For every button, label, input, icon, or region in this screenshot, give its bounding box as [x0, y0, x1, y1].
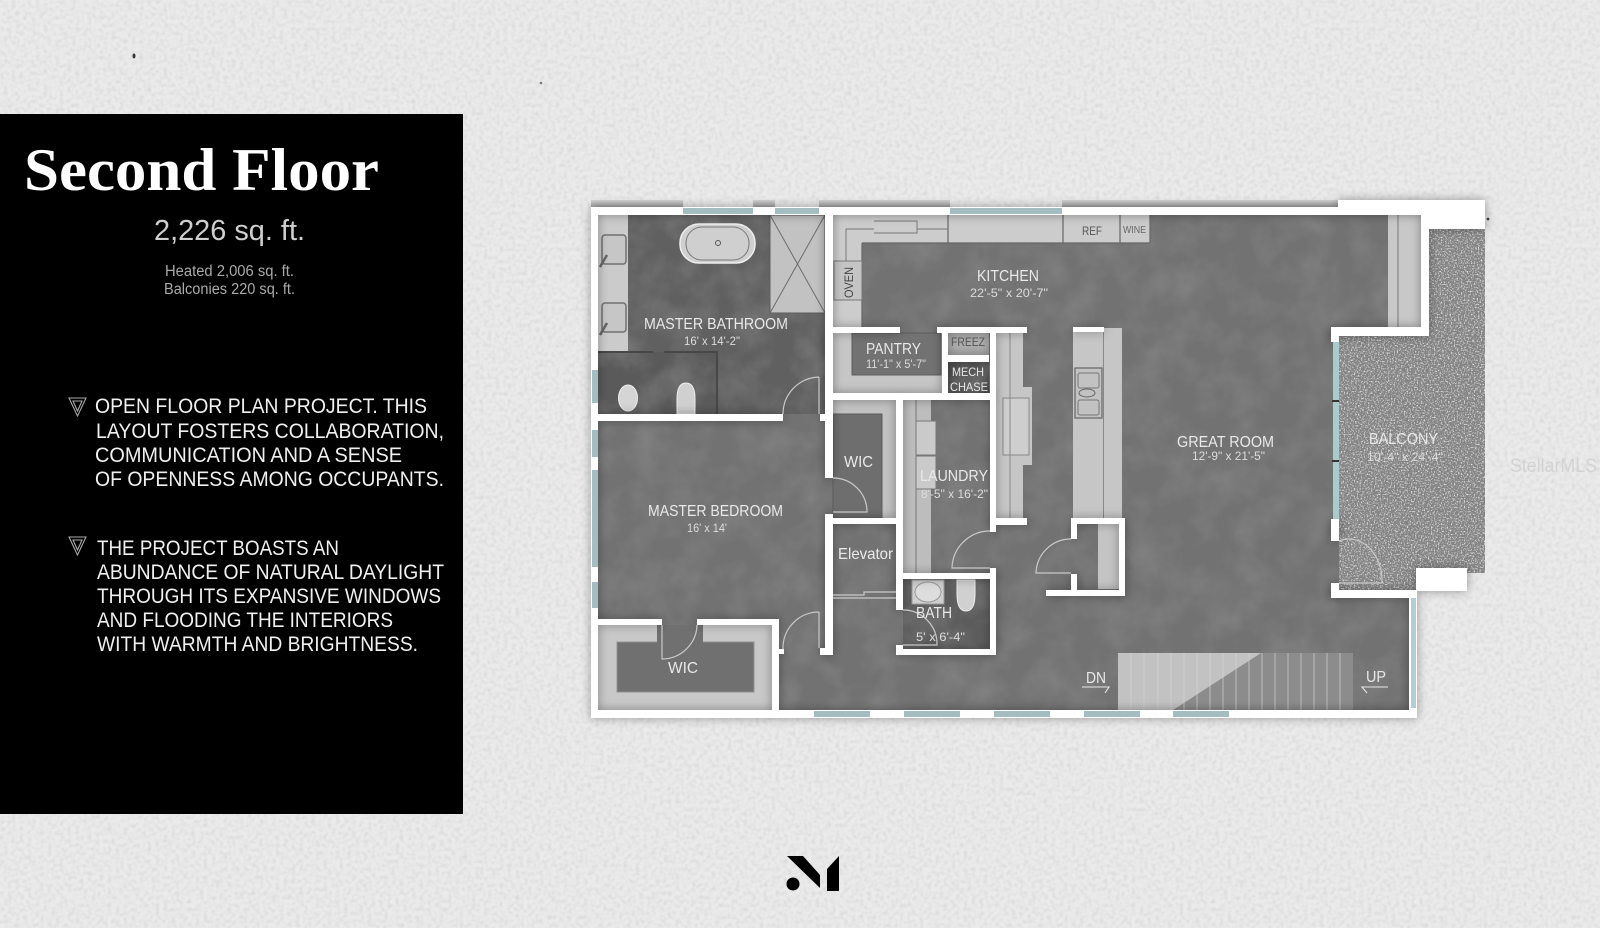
- panel: black description panel: [0, 114, 463, 814]
- label: elevator: Elevator: [838, 546, 894, 563]
- label: great room: GREAT ROOM: [1177, 434, 1274, 451]
- label: master bathroom: [644, 316, 788, 348]
- bullet text 1: OF OPENNESS AMONG OCCUPANTS.: [95, 468, 444, 491]
- label: kitchen: 22'-5" x 20'-7": [970, 286, 1048, 300]
- fixtures and counters: [598, 215, 1421, 710]
- bath fixtures: [912, 580, 975, 611]
- label: mech chase: [950, 365, 988, 394]
- bullet text 2: THROUGH ITS EXPANSIVE WINDOWS: [97, 585, 441, 608]
- label: master bedroom: [648, 503, 783, 535]
- label: bath: [916, 605, 965, 644]
- floors: [598, 215, 1421, 710]
- kitchen counters: [833, 215, 1421, 327]
- label: kitchen: [970, 268, 1048, 300]
- bullet text 2: THE PROJECT BOASTS AN: [97, 537, 339, 560]
- label: laundry: [920, 468, 988, 501]
- label: master bedroom: MASTER BEDROOM: [648, 503, 783, 520]
- label: bath: BATH: [916, 605, 952, 622]
- windows: [592, 208, 1416, 717]
- label: upper WIC: WIC: [844, 454, 873, 471]
- bullet text 1: [95, 395, 444, 491]
- label: stairs up: UP: [1366, 669, 1386, 686]
- bullet text 1: LAYOUT FOSTERS COLLABORATION,: [96, 420, 444, 443]
- lower WIC: [598, 625, 772, 710]
- label: pantry: 11'-1" x 5'-7": [866, 357, 926, 371]
- label: master bathroom: MASTER BATHROOM: [644, 316, 788, 333]
- label: mech chase: MECH: [952, 365, 984, 379]
- icon: triangle bullet 2: [69, 537, 86, 555]
- label: great room: [1177, 434, 1274, 463]
- title: Second Floor: [24, 137, 379, 203]
- label: balcony: BALCONY: [1369, 431, 1438, 448]
- bullet text 2: AND FLOODING THE INTERIORS: [97, 609, 393, 632]
- label: lower WIC: WIC: [668, 660, 698, 677]
- island closet: [1098, 524, 1119, 589]
- area breakdown: [164, 263, 295, 298]
- icon: triangle bullet 1: [69, 398, 86, 416]
- label: laundry: LAUNDRY: [920, 468, 988, 485]
- label: oven: OVEN: [842, 267, 856, 298]
- label: stairs down: DN: [1086, 670, 1106, 687]
- label: laundry: 8'-5" x 16'-2": [921, 487, 988, 501]
- label: ref: REF: [1082, 224, 1102, 238]
- walls: [591, 200, 1485, 718]
- bullet text 1: OPEN FLOOR PLAN PROJECT. THIS: [95, 395, 427, 418]
- bullet text 2: ABUNDANCE OF NATURAL DAYLIGHT: [97, 561, 444, 584]
- room labels: [644, 224, 1443, 693]
- label: balcony: 10'-4" x 24'-4": [1367, 450, 1443, 464]
- bullet text 1: COMMUNICATION AND A SENSE: [95, 444, 402, 467]
- label: mech chase: CHASE: [950, 380, 988, 394]
- top exterior shadow band: [591, 200, 1338, 207]
- label: pantry: [866, 341, 926, 371]
- pantry: [833, 327, 989, 393]
- WIC and laundry counters: [833, 333, 1032, 573]
- total area: 2,226 sq. ft.: [154, 215, 305, 247]
- label: great room: 12'-9" x 21'-5": [1192, 449, 1265, 463]
- label: bath: 5' x 6'-4": [916, 630, 965, 644]
- label: stairs down: [1082, 670, 1109, 693]
- label: pantry: PANTRY: [866, 341, 921, 358]
- balcony floor: [1339, 229, 1485, 590]
- label: master bedroom: 16' x 14': [687, 521, 727, 535]
- label: wine: WINE: [1123, 225, 1146, 236]
- label: kitchen: KITCHEN: [977, 268, 1039, 285]
- bullet text 2: WITH WARMTH AND BRIGHTNESS.: [97, 633, 418, 656]
- area breakdown: Heated 2,006 sq. ft.: [165, 263, 294, 280]
- logo mark: [786, 856, 839, 891]
- kitchen island: [1073, 328, 1122, 518]
- label: balcony: [1367, 431, 1443, 464]
- staircase: [1118, 653, 1353, 710]
- bullet text 2: [97, 537, 444, 656]
- floor plan: [591, 200, 1485, 718]
- door swings: [662, 377, 1382, 659]
- master bath vanity and shower: [598, 215, 825, 414]
- label: master bathroom: 16' x 14'-2": [684, 334, 740, 348]
- label: freezer: FREEZ: [951, 335, 985, 349]
- area breakdown: Balconies 220 sq. ft.: [164, 281, 295, 298]
- label: stairs up: [1362, 669, 1388, 693]
